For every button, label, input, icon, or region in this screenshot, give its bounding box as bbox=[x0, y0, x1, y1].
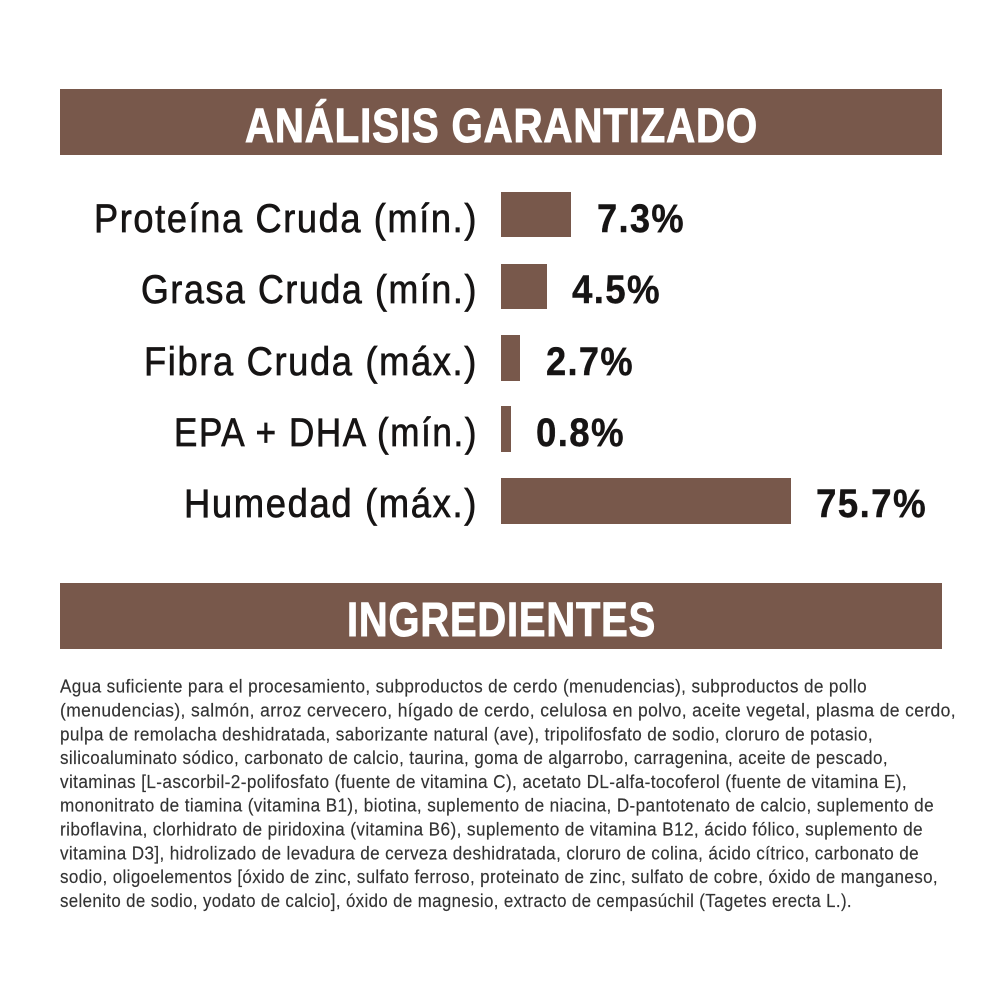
heading: ingredientes: INGREDIENTES bbox=[347, 594, 656, 647]
text block: ingredients list: Agua suficiente para el procesamiento, subproductos de cerdo (menudencias), subproductos de pollo bbox=[60, 677, 867, 697]
text block: ingredients list: selenito de sodio, yodato de calcio], óxido de magnesio, extracto de cempasúchil (Tagetes erecta L.). bbox=[60, 891, 852, 911]
text block: ingredients list: riboflavina, clorhidrato de piridoxina (vitamina B6), suplemento de vitamina B12, ácido fólico, suplemento de bbox=[60, 820, 923, 840]
text block: ingredients list: pulpa de remolacha deshidratada, saborizante natural (ave), tripolifosfato de sodio, cloruro de potasio, bbox=[60, 724, 873, 744]
text block: ingredients list: sodio, oligoelementos [óxido de zinc, sulfato ferroso, proteinato de zinc, sulfato de cobre, óxido de manganeso, bbox=[60, 867, 938, 887]
row: grasa cruda: Grasa Cruda (mín.) bbox=[141, 268, 478, 312]
text block: ingredients list bbox=[60, 677, 956, 911]
row: epa + dha: EPA + DHA (mín.) bbox=[174, 411, 478, 455]
row: proteína cruda: 7.3% bbox=[597, 197, 685, 241]
row: epa + dha: 0.8% bbox=[536, 411, 625, 455]
row: humedad: Humedad (máx.) bbox=[184, 482, 478, 526]
row: proteína cruda: Proteína Cruda (mín.) bbox=[94, 197, 478, 241]
row: fibra cruda: 2.7% bbox=[546, 340, 634, 384]
row: humedad: 75.7% bbox=[816, 482, 927, 526]
row: fibra cruda: Fibra Cruda (máx.) bbox=[144, 340, 478, 384]
text block: ingredients list: vitaminas [L-ascorbil-2-polifosfato (fuente de vitamina C), acetato DL-alfa-tocoferol (fuente de vitamina E), bbox=[60, 772, 907, 792]
row: fibra cruda bbox=[144, 335, 634, 384]
heading: análisis garantizado: ANÁLISIS GARANTIZADO bbox=[245, 99, 758, 153]
row: proteína cruda bbox=[94, 192, 685, 241]
panel: ingredientes header bbox=[60, 583, 942, 649]
text block: ingredients list: silicoaluminato sódico, carbonato de calcio, taurina, goma de algarrobo, carragenina, aceite de pescado, bbox=[60, 748, 888, 768]
row: epa + dha bbox=[174, 406, 625, 455]
text block: ingredients list: (menudencias), salmón, arroz cervecero, hígado de cerdo, celulosa en polvo, aceite vegetal, plasma de cerdo, bbox=[60, 700, 956, 720]
bar chart: guaranteed analysis bbox=[94, 192, 927, 526]
row: grasa cruda bbox=[141, 264, 661, 312]
panel: análisis garantizado header bbox=[60, 89, 942, 155]
row: humedad bbox=[184, 478, 927, 526]
text block: ingredients list: vitamina D3], hidrolizado de levadura de cerveza deshidratada, cloruro de colina, ácido cítrico, carbonato de bbox=[60, 843, 919, 863]
row: grasa cruda: 4.5% bbox=[572, 268, 661, 312]
text block: ingredients list: mononitrato de tiamina (vitamina B1), biotina, suplemento de niacina, D-pantotenato de calcio, suplemento de bbox=[60, 796, 934, 816]
